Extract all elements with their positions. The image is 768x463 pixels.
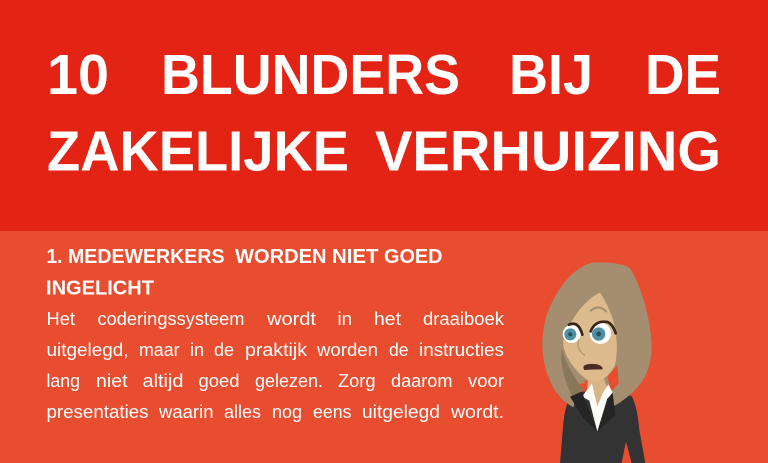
icon: worried businesswoman character bbox=[542, 263, 652, 463]
shirt collar bbox=[582, 383, 613, 432]
text block: blunder 1 body: gelezen. bbox=[255, 371, 323, 391]
text block: blunder 1 body: in bbox=[338, 309, 352, 329]
text block: blunder 1 body: de bbox=[389, 340, 408, 360]
forehead hair line bbox=[590, 307, 607, 312]
title: DE bbox=[645, 43, 721, 107]
text block: blunder 1 body: maar bbox=[139, 340, 180, 360]
text block: blunder 1 body: nog bbox=[272, 402, 302, 422]
text block: blunder 1 body: worden bbox=[316, 340, 378, 360]
heading: blunder 1: MEDEWERKERS bbox=[68, 246, 224, 268]
text block: blunder 1 body: in bbox=[190, 340, 204, 360]
text block: blunder 1 body: altijd bbox=[142, 371, 184, 391]
text block: blunder 1 body: de bbox=[214, 340, 234, 360]
face bbox=[563, 293, 617, 381]
text block: blunder 1 body: presentaties bbox=[46, 402, 148, 422]
text block: blunder 1 body: praktijk bbox=[245, 340, 308, 360]
eyebrows bbox=[569, 322, 616, 335]
title: BIJ bbox=[509, 43, 593, 107]
title: 10 bbox=[47, 43, 109, 107]
title: VERHUIZING bbox=[375, 120, 721, 184]
text block: blunder 1 body: voor bbox=[468, 371, 504, 391]
text block: blunder 1 body: draaiboek bbox=[423, 309, 505, 329]
heading: blunder 1: NIET bbox=[332, 246, 378, 268]
text block: blunder 1 body: alles bbox=[224, 402, 261, 422]
text block: blunder 1 body: wordt bbox=[266, 309, 316, 329]
text block: blunder 1 body: Het bbox=[46, 309, 75, 329]
text block: blunder 1 body: goed bbox=[198, 371, 240, 391]
hair back bbox=[542, 263, 652, 408]
neck bbox=[587, 377, 608, 417]
text block: blunder 1 body bbox=[46, 309, 505, 422]
text block: blunder 1 body: lang bbox=[46, 371, 80, 391]
text block: blunder 1 body: coderingssysteem bbox=[98, 309, 244, 329]
blazer bbox=[560, 392, 645, 463]
heading: blunder 1: WORDEN bbox=[235, 246, 326, 268]
title: ZAKELIJKE bbox=[47, 120, 349, 184]
darker hair strand bbox=[561, 348, 583, 402]
heading: blunder 1: 1. bbox=[46, 246, 62, 268]
lapels bbox=[570, 392, 615, 432]
text block: blunder 1 body: uitgelegd, bbox=[46, 340, 128, 360]
text block: blunder 1 body: instructies bbox=[419, 340, 504, 360]
text block: blunder 1 body: eens bbox=[313, 402, 352, 422]
left eye bbox=[563, 325, 581, 343]
mouth bbox=[583, 364, 603, 370]
text block: blunder 1 body: waarin bbox=[158, 402, 214, 422]
text block: blunder 1 body: daarom bbox=[391, 371, 452, 391]
text block: blunder 1 body: uitgelegd bbox=[362, 402, 440, 422]
title: BLUNDERS bbox=[161, 43, 460, 107]
text block: blunder 1 body: niet bbox=[96, 371, 128, 391]
heading: blunder 1: INGELICHT bbox=[46, 278, 154, 300]
heading: blunder 1 bbox=[46, 246, 442, 300]
text block: blunder 1 body: Zorg bbox=[338, 371, 376, 391]
heading: blunder 1: GOED bbox=[384, 246, 442, 268]
background gaps beside neck bbox=[584, 365, 619, 393]
right eye bbox=[590, 323, 611, 344]
panel: blunder section bbox=[0, 231, 768, 463]
panel: title banner bbox=[0, 0, 768, 231]
text block: blunder 1 body: wordt. bbox=[450, 402, 504, 422]
nose bbox=[578, 339, 585, 355]
title bbox=[47, 43, 721, 184]
text block: blunder 1 body: het bbox=[374, 309, 401, 329]
